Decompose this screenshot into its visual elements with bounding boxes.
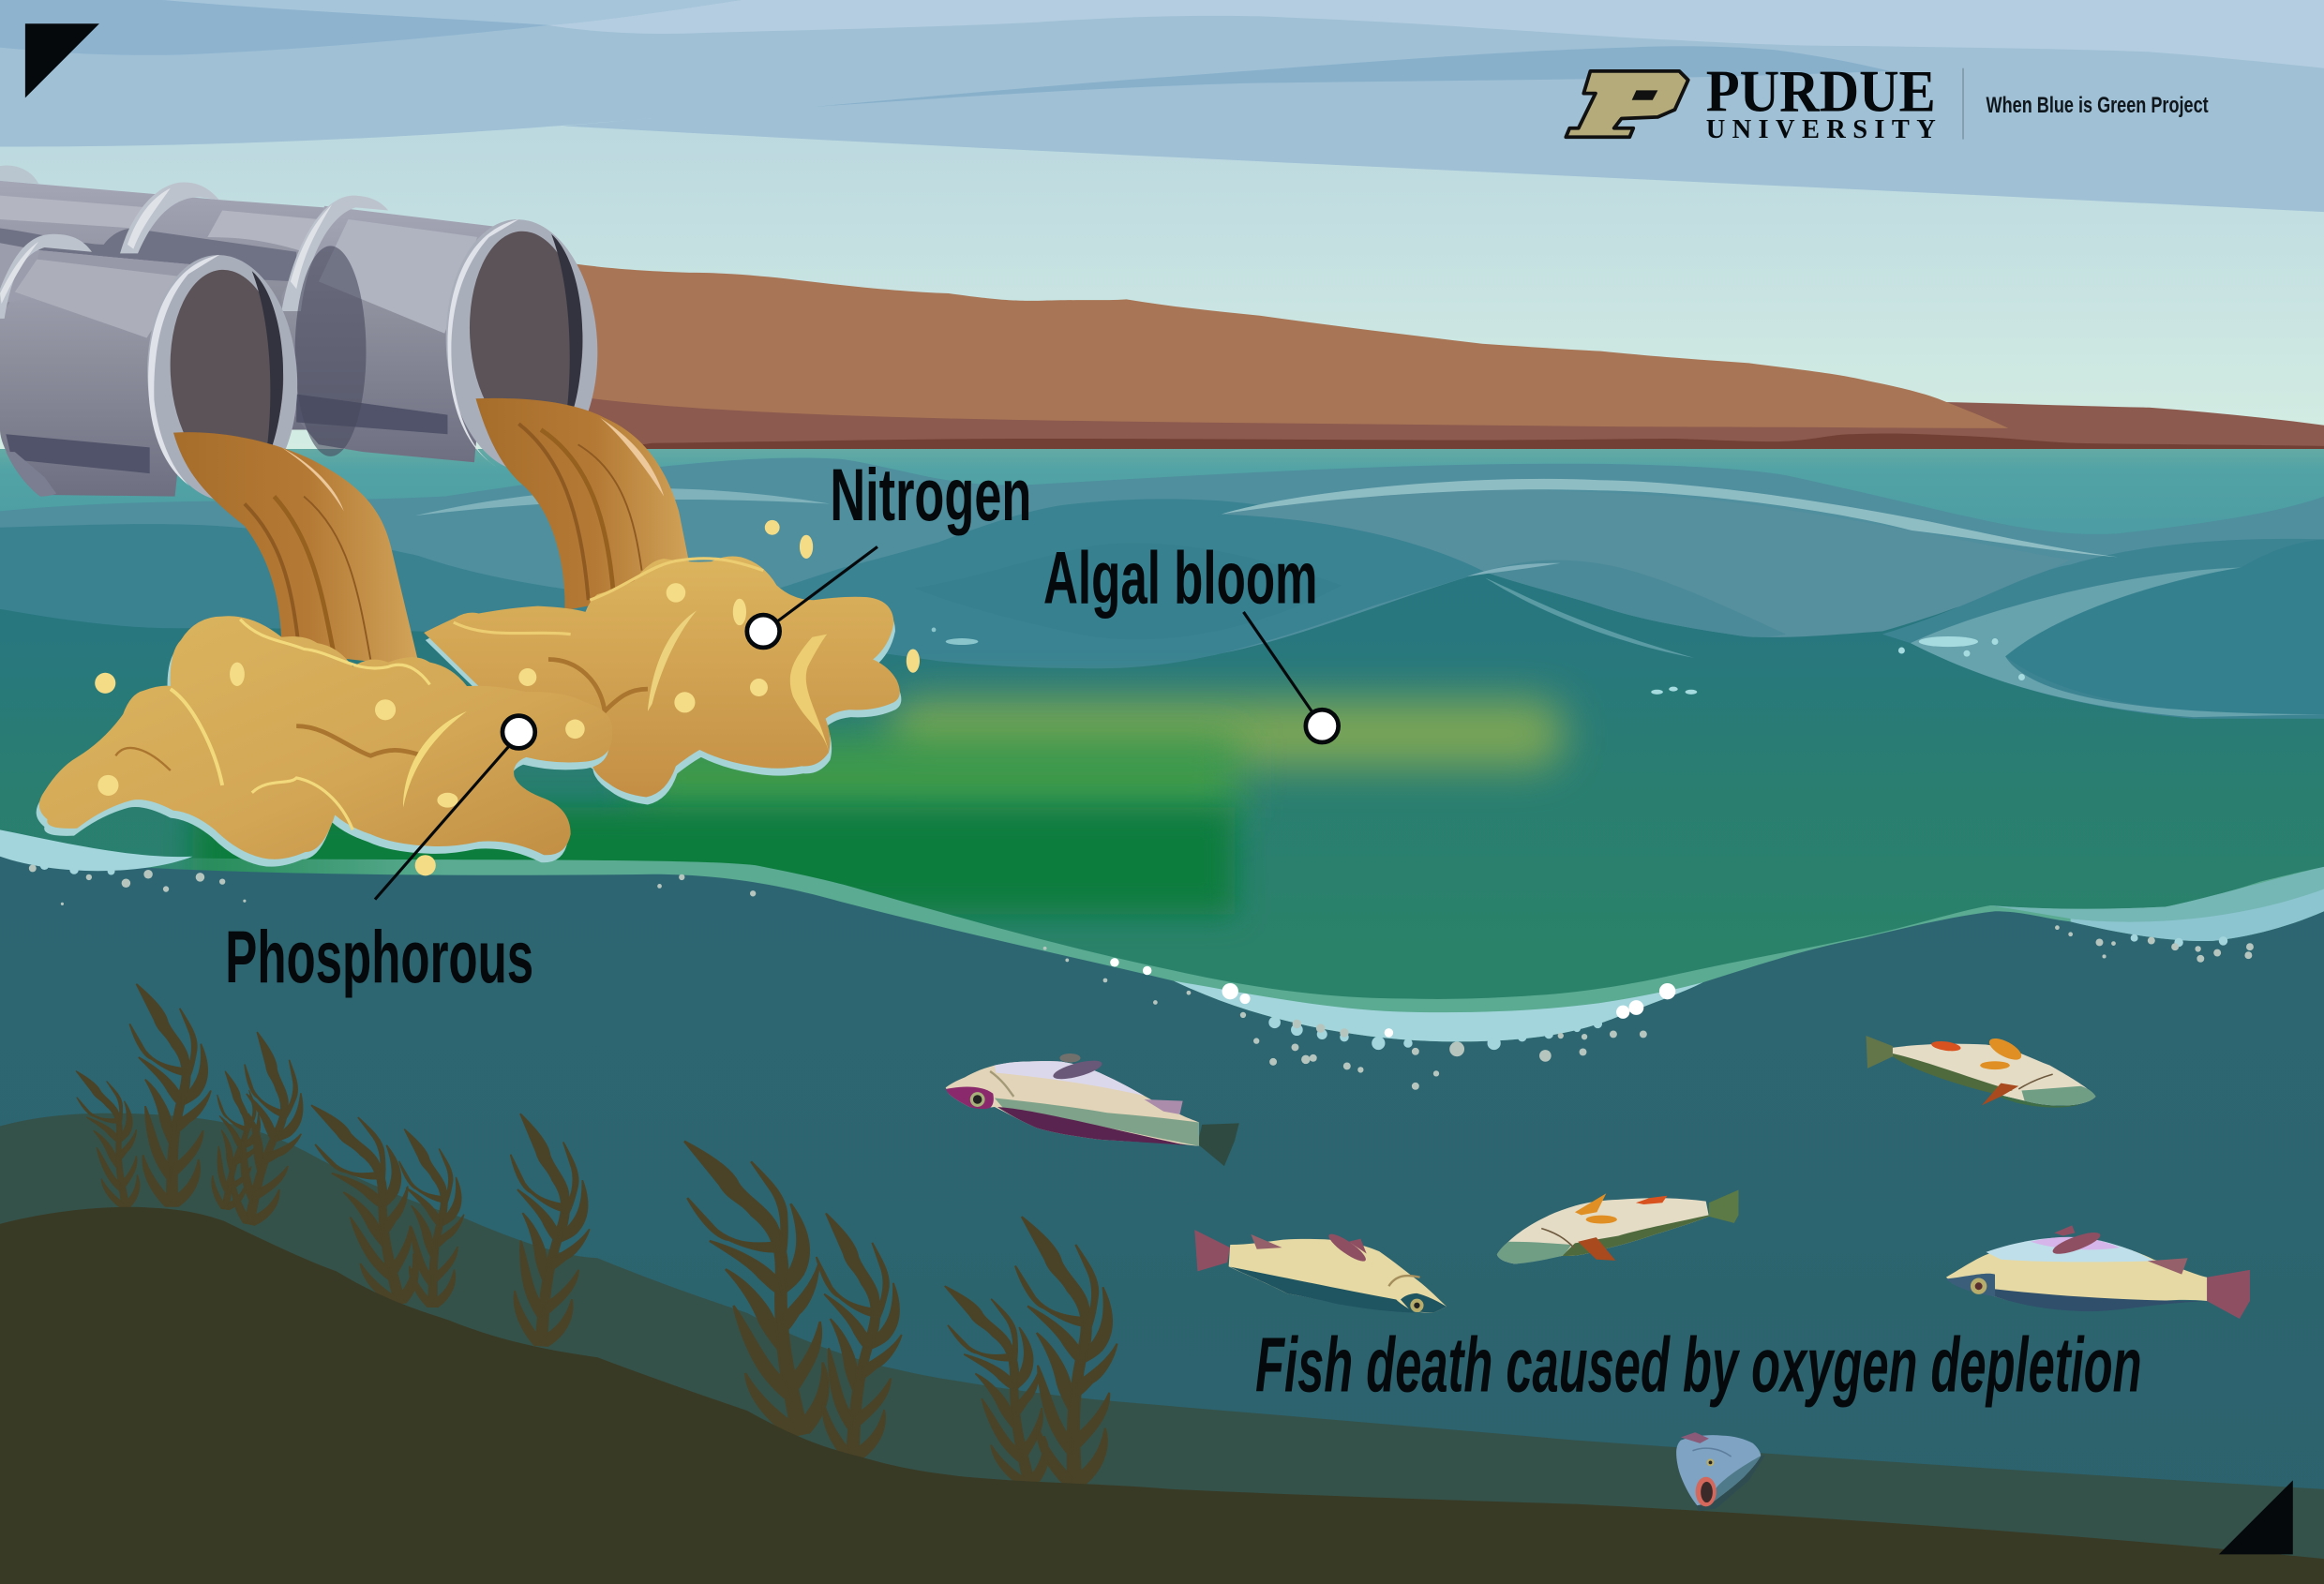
fish: cream with maroon tail xyxy=(1194,1230,1447,1313)
foam rear xyxy=(424,557,901,804)
callout: Phosphorous xyxy=(225,716,535,998)
light foam lenses and drips xyxy=(0,829,2324,1050)
Purdue logo xyxy=(1566,59,2209,144)
callout: Algal bloom: Algal bloom xyxy=(1043,535,1318,619)
callout: Nitrogen: Nitrogen xyxy=(830,453,1031,536)
Purdue logo: UNIVERSITY xyxy=(1706,115,1936,144)
corner mark top left xyxy=(25,23,99,97)
water surface xyxy=(0,449,2324,1071)
fish: lower right lavender xyxy=(1946,1225,2250,1319)
corner mark bottom right xyxy=(2219,1480,2293,1554)
Purdue logo: When Blue is Green Project xyxy=(1987,94,2209,118)
back sea floor xyxy=(0,1113,2324,1584)
seaweed xyxy=(72,984,1122,1496)
foam front xyxy=(37,616,612,867)
fish: bottom head-on xyxy=(1676,1432,1765,1512)
Purdue logo: PURDUE xyxy=(1706,59,1936,125)
callout: Algal bloom xyxy=(1043,535,1339,742)
outfall front xyxy=(173,432,419,666)
fish: upper right spotted xyxy=(1866,1034,2096,1108)
rear pipe xyxy=(281,196,604,475)
callout: Nitrogen xyxy=(747,453,1031,648)
far pipes xyxy=(0,165,324,429)
fish: purple belly xyxy=(946,1054,1239,1166)
front sea floor xyxy=(0,1207,2324,1584)
distant hill xyxy=(563,262,2324,451)
bubbles xyxy=(29,864,2254,1090)
front pipe xyxy=(0,234,304,504)
sky background xyxy=(0,0,2324,452)
fish: center spotted xyxy=(1497,1189,1739,1264)
callout: Phosphorous: Phosphorous xyxy=(225,915,533,998)
algal bloom xyxy=(193,699,1564,914)
surface foam band xyxy=(89,857,2324,1082)
outfall rear xyxy=(475,398,694,610)
underwater body xyxy=(0,857,2324,1584)
yellow nutrient dots xyxy=(95,520,920,875)
